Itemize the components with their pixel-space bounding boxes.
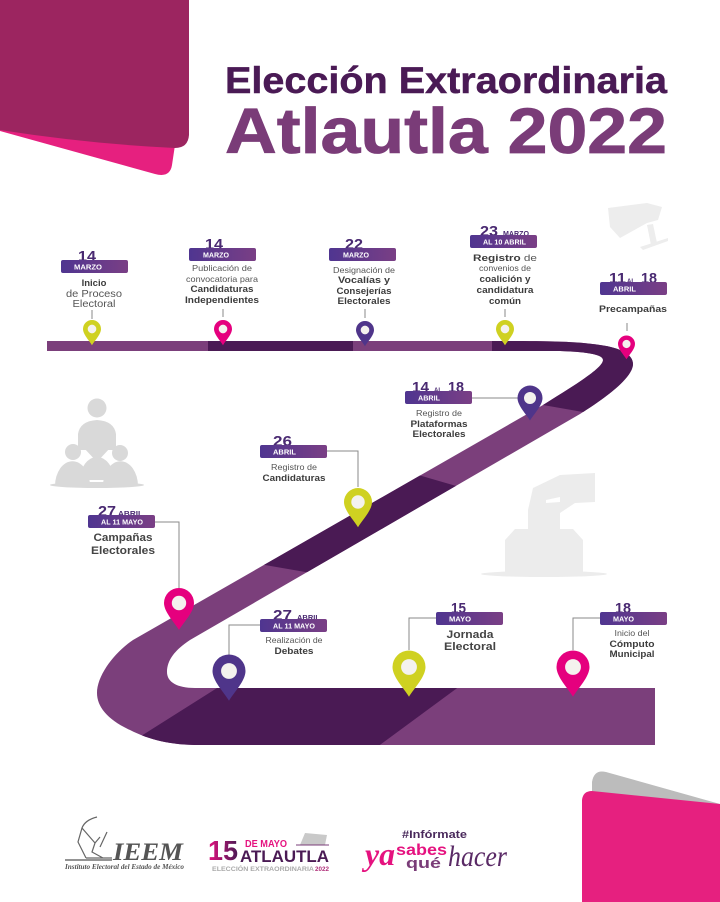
description: coalición y [480,274,531,285]
description: convocatoria para [186,274,258,284]
logo: IEEM: IEEM [112,839,184,866]
date badge: 15 [451,600,466,617]
icon: group of people [50,398,144,488]
pin [392,650,426,697]
description [266,635,323,657]
date badge: ABRIL [118,511,144,518]
connector [504,309,506,317]
date badge: 14 [205,236,224,253]
date badge: 22 [345,236,363,253]
pin [212,654,246,701]
description: Realización de [266,635,323,645]
title: Elección Extraordinaria [225,60,667,101]
date badge: ABRIL [613,284,636,294]
description: Electorales [91,545,155,557]
description [410,408,468,440]
description: Independientes [185,295,259,306]
date badge: AL 11 MAYO [273,622,315,630]
date badge: 14 [412,379,430,396]
description: Municipal [610,649,654,660]
date badge: 27 [98,503,116,520]
date badge: 27 [273,607,292,624]
pin [518,386,542,420]
logo: 15 de mayo Atlautla: DE MAYO [245,839,287,850]
milestone: Candidaturas Independientes [185,236,259,345]
description: candidatura [476,285,534,296]
description: Candidaturas [262,473,326,484]
date badge [436,600,503,625]
pin [83,320,101,345]
milestone: Inicio de Proceso Electoral [61,248,128,345]
milestone: Vocalías y Consejerías Electorales [329,236,396,346]
date badge: AL [627,279,635,285]
date badge [260,433,327,458]
corner shape: bottom right [582,771,720,902]
connector [327,451,358,487]
icon: hand casting ballot [481,473,607,577]
date badge [600,600,667,625]
description: Vocalías y [338,275,391,286]
description: Inicio [82,278,107,289]
milestone: Realización de Debates [212,607,327,701]
logo: 15 de mayo Atlautla [208,833,330,873]
description [185,263,259,306]
date badge: MAYO [449,614,471,624]
pin [496,320,514,345]
description: Consejerías [336,286,392,297]
description: común [489,296,521,307]
logo: 15 de mayo Atlautla: ELECCIÓN EXTRAORDINARIA [212,865,315,873]
logo: 15 de mayo Atlautla: 2022 [315,867,330,873]
logo: Ya sabes qué hacer: sabes [396,842,447,859]
description: Electoral [444,641,496,653]
logo: Ya sabes qué hacer: qué [406,855,441,872]
logo: 15 de mayo Atlautla: 15 [208,835,238,866]
date badge [600,270,667,295]
date badge: ABRIL [297,615,321,622]
date badge [61,248,128,273]
description [91,532,155,557]
pin [618,336,635,359]
icon: megaphone [608,203,668,250]
date badge: 26 [273,433,292,450]
date badge: ABRIL [273,448,296,456]
pin [344,488,372,527]
description: Cómputo [610,639,655,650]
milestone: Inicio del Cómputo Municipal [556,600,667,697]
description [473,253,537,307]
description: Registro de [271,462,317,472]
logo: Ya sabes qué hacer: hacer [448,840,507,873]
milestone: Registro de convenios de coalición [470,223,537,345]
milestone: Registro de Plataformas Electorales [405,379,542,440]
description: Debates [274,646,314,657]
connector [472,397,518,399]
description: Electorales [412,429,466,440]
milestone: Campañas Electorales [88,503,194,630]
description [610,628,655,660]
description: Publicación de [192,263,252,273]
date badge: AL 10 ABRIL [483,238,526,246]
description: Electorales [338,296,390,307]
date badge: 11 [609,270,626,287]
description: Candidaturas [190,284,254,295]
date badge [260,607,327,632]
date badge: MARZO [203,250,229,260]
description [66,278,122,310]
pin [356,321,374,346]
description: Registro de [473,253,537,264]
description [333,265,395,307]
description: de Proceso [66,289,122,300]
pin [556,650,590,697]
logo: Ya sabes qué hacer: #Infórmate [402,829,467,841]
milestone: Jornada Electoral [392,600,503,697]
logo: Ya sabes qué hacer: ya [361,836,395,872]
corner shape: top left [0,0,189,175]
connector [222,309,224,317]
date badge: 14 [78,248,97,265]
date badge [88,503,155,528]
logo: Ya sabes qué hacer [361,829,507,873]
description: Designación de [333,265,395,275]
description [444,629,496,653]
milestone: Registro de Candidaturas [260,433,372,527]
date badge: 18 [641,270,657,287]
timeline road [47,341,655,745]
date badge: 18 [615,600,631,617]
date badge [329,236,396,261]
date badge: AL 11 MAYO [101,518,143,526]
connector [91,310,93,319]
date badge: ABRIL [418,394,440,402]
date badge: MAYO [613,614,634,624]
title [225,60,667,167]
milestone: Precampañas [599,270,667,359]
description: Electoral [72,299,116,310]
date badge [470,223,537,248]
connector [229,625,260,655]
connector [573,618,600,650]
date badge: MARZO [503,231,530,238]
date badge: MARZO [343,250,369,260]
connector [626,323,628,331]
pin [214,320,232,345]
date badge: 23 [480,223,498,240]
logo: IEEM: Instituto Electoral del Estado de México [64,863,185,871]
pin [164,588,194,630]
description: Inicio del [614,628,650,638]
date badge [189,236,256,261]
description: Precampañas [599,304,667,315]
date badge: 18 [448,379,464,396]
description [262,462,326,484]
date badge: AL [434,388,442,394]
description: Campañas [94,532,152,544]
title: Atlautla 2022 [225,95,667,167]
logo: 15 de mayo Atlautla: ATLAUTLA [240,847,329,866]
logo: IEEM [64,817,185,871]
description: Jornada [446,629,494,641]
description: Registro de [416,408,462,418]
description: convenios de [479,263,531,273]
connector [409,618,436,650]
date badge [405,379,472,404]
connector [155,522,179,588]
date badge: MARZO [74,262,102,272]
description: Plataformas [410,419,468,430]
connector [364,309,366,318]
